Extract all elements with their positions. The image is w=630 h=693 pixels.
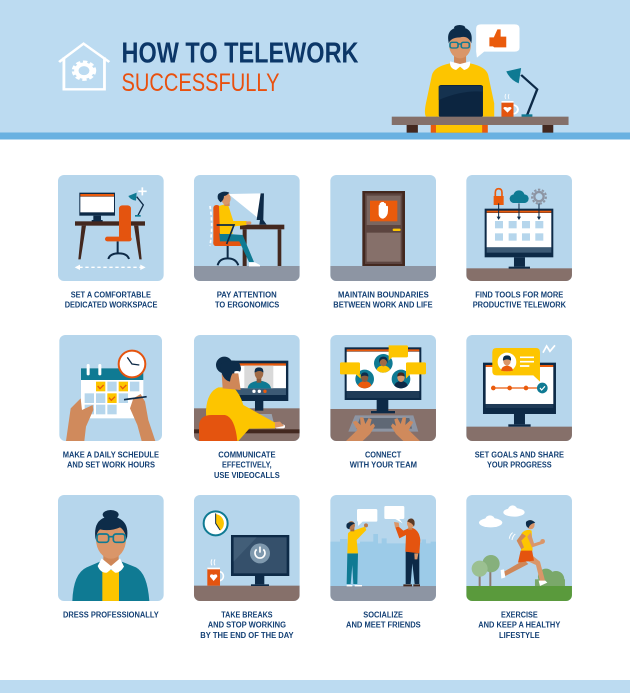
- caption: [475, 449, 564, 470]
- power button: [250, 543, 270, 563]
- caption: PRODUCTIVE TELEWORK: [473, 300, 567, 310]
- caption: [65, 289, 158, 310]
- caption: TAKE BREAKS: [221, 609, 273, 619]
- monitor: [483, 363, 556, 427]
- caption: [350, 449, 417, 470]
- floor: [330, 266, 436, 281]
- monitor: [345, 347, 421, 413]
- caption: AND KEEP A HEALTHY: [478, 620, 561, 630]
- desk: [330, 409, 436, 441]
- stop sign: [370, 201, 397, 221]
- caption: COMMUNICATE: [218, 449, 276, 459]
- measure arrow: [75, 265, 146, 270]
- card: exercise: [466, 495, 572, 640]
- calendar days: [85, 382, 139, 414]
- face: [96, 520, 126, 559]
- sweater: [425, 63, 494, 133]
- sight cone: [228, 193, 263, 218]
- sparkle: [138, 187, 147, 195]
- mug: [501, 94, 518, 117]
- card: goals and progress: [466, 335, 572, 470]
- card: set a comfortable dedicated workspace: [58, 175, 164, 310]
- man: [394, 519, 420, 586]
- caption: LIFESTYLE: [499, 630, 540, 640]
- desk: [392, 117, 569, 133]
- lamp: [128, 193, 143, 217]
- call controls: [252, 390, 267, 393]
- hair: [448, 25, 472, 43]
- video caller: [248, 367, 271, 388]
- checked days: [96, 382, 128, 403]
- caption: [478, 609, 561, 640]
- caption: PAY ATTENTION: [217, 289, 277, 299]
- speech bubbles: [357, 506, 404, 526]
- caption: BY THE END OF THE DAY: [200, 630, 294, 640]
- torso and arm: [219, 203, 247, 234]
- icon: house with gear: [59, 44, 109, 89]
- illustration: portrait in teal jacket: [58, 495, 164, 601]
- collar: [98, 558, 124, 573]
- neck: [103, 552, 119, 567]
- illustration: desk with monitor, chair and lamp: [58, 175, 164, 281]
- illustration: clock, mug and monitor off: [194, 495, 300, 601]
- card: take breaks: [194, 495, 300, 640]
- shoe: [249, 262, 260, 266]
- desk: [194, 408, 300, 441]
- caption: [200, 609, 294, 640]
- caption: SET A COMFORTABLE: [71, 289, 151, 299]
- pavement: [330, 586, 436, 601]
- card: find tools: [466, 175, 572, 310]
- handle: [393, 229, 401, 231]
- header band: [0, 0, 630, 140]
- monitor: [231, 535, 289, 586]
- collar: [450, 61, 470, 70]
- skyline: [330, 534, 436, 586]
- clock: [204, 511, 228, 535]
- woman: [346, 521, 368, 586]
- sweater: [206, 387, 275, 441]
- bush: [535, 569, 565, 588]
- caption: [215, 289, 280, 310]
- card: daily schedule: [59, 335, 162, 470]
- illustration: two people talking outdoors: [330, 495, 436, 601]
- trend line: [543, 345, 555, 353]
- pen: [124, 397, 147, 400]
- hair: [95, 510, 127, 540]
- desk lamp: [506, 68, 537, 117]
- neck and face: [449, 33, 471, 64]
- armrest: [217, 225, 234, 244]
- sweater: [102, 570, 119, 601]
- neck: [222, 373, 241, 390]
- caption: [214, 449, 280, 480]
- title: HOW TO TELEWORK: [122, 38, 359, 70]
- app icons: [495, 221, 543, 241]
- ground: [466, 586, 572, 601]
- monitor: [232, 361, 288, 411]
- legs: [219, 233, 254, 262]
- floor: [466, 268, 572, 281]
- keys: [356, 418, 412, 429]
- illustration: monitor with apps and cloud: [466, 175, 572, 281]
- clock: [119, 351, 145, 377]
- caption: BETWEEN WORK AND LIFE: [333, 300, 433, 310]
- card: socialize: [330, 495, 436, 630]
- floor: [194, 266, 300, 281]
- motion lines: [509, 533, 515, 540]
- head: [218, 192, 231, 206]
- desk: [75, 221, 145, 259]
- avatars: [355, 354, 410, 388]
- gear: [532, 190, 546, 204]
- caption: [473, 289, 567, 310]
- door: [362, 191, 405, 266]
- caption: SOCIALIZE: [363, 609, 403, 619]
- caption: EXERCISE: [501, 609, 538, 619]
- left hand: [66, 398, 93, 441]
- monitor: [485, 209, 553, 269]
- desk: [240, 225, 284, 266]
- caption: MAINTAIN BOUNDARIES: [338, 289, 429, 299]
- caption: FIND TOOLS FOR MORE: [475, 289, 564, 299]
- caption: DRESS PROFESSIONALLY: [63, 609, 159, 619]
- desk: [194, 586, 300, 601]
- right hand: [130, 394, 155, 441]
- hand and mouse: [272, 422, 285, 428]
- clouds: [479, 505, 525, 527]
- caption: EFFECTIVELY,: [222, 460, 272, 470]
- caption: TO ERGONOMICS: [215, 300, 280, 310]
- glasses: [97, 534, 125, 542]
- caption: AND SET WORK HOURS: [67, 460, 155, 470]
- caption: AND MEET FRIENDS: [346, 620, 421, 630]
- hair: [216, 357, 241, 382]
- spine dashes: [210, 206, 212, 246]
- speech bubble with thumbs up: [476, 24, 520, 58]
- caption: [63, 449, 159, 470]
- lock: [494, 189, 504, 205]
- illustration: woman at desk with laptop: [392, 24, 569, 133]
- hand: [246, 221, 251, 224]
- timeline: [491, 383, 548, 393]
- caption: MAKE A DAILY SCHEDULE: [63, 449, 159, 459]
- monitor: [79, 193, 115, 222]
- illustration: runner in park: [466, 495, 572, 601]
- caption: DEDICATED WORKSPACE: [65, 300, 158, 310]
- caption: AND STOP WORKING: [208, 620, 286, 630]
- card: pay attention to ergonomics: [194, 175, 300, 310]
- illustration: calendar, clock and hands: [59, 335, 162, 441]
- keyboard: [348, 415, 418, 432]
- card: communicate effectively: [194, 335, 300, 480]
- subtitle: SUCCESSFULLY: [122, 69, 280, 97]
- chair: [105, 205, 132, 259]
- illustration: seated posture at desk: [194, 175, 300, 281]
- illustration: monitor with progress timeline: [466, 335, 572, 441]
- glasses: [450, 42, 469, 48]
- profile bubble: [492, 348, 540, 382]
- caption: [333, 289, 433, 310]
- illustration: closed door with stop sign: [330, 175, 436, 281]
- mug: [207, 559, 223, 586]
- chair: [199, 415, 237, 441]
- illustration: woman on video call: [194, 335, 300, 441]
- trees: [472, 555, 500, 587]
- caption: [346, 609, 421, 630]
- caption: CONNECT: [365, 449, 402, 459]
- keyboard: [247, 414, 274, 423]
- laptop: [439, 85, 483, 117]
- hands: [346, 417, 420, 441]
- chair edges: [431, 123, 488, 133]
- arrows: [497, 203, 541, 220]
- caption: USE VIDEOCALLS: [214, 470, 280, 480]
- calendar: [81, 364, 143, 418]
- chair: [213, 205, 243, 265]
- illustration: monitor with team avatars: [330, 335, 436, 441]
- cloud: [510, 190, 529, 203]
- caption: WITH YOUR TEAM: [350, 460, 417, 470]
- card: connect with team: [330, 335, 436, 470]
- card: maintain boundaries: [330, 175, 436, 310]
- monitor: [257, 193, 267, 225]
- card: dress professionally: [58, 495, 164, 619]
- footer band: [0, 680, 630, 693]
- runner: [501, 520, 547, 586]
- jacket: [72, 562, 149, 601]
- caption: YOUR PROGRESS: [487, 460, 552, 470]
- chat bubbles: [340, 345, 426, 379]
- caption: SET GOALS AND SHARE: [475, 449, 564, 459]
- floor: [466, 427, 572, 441]
